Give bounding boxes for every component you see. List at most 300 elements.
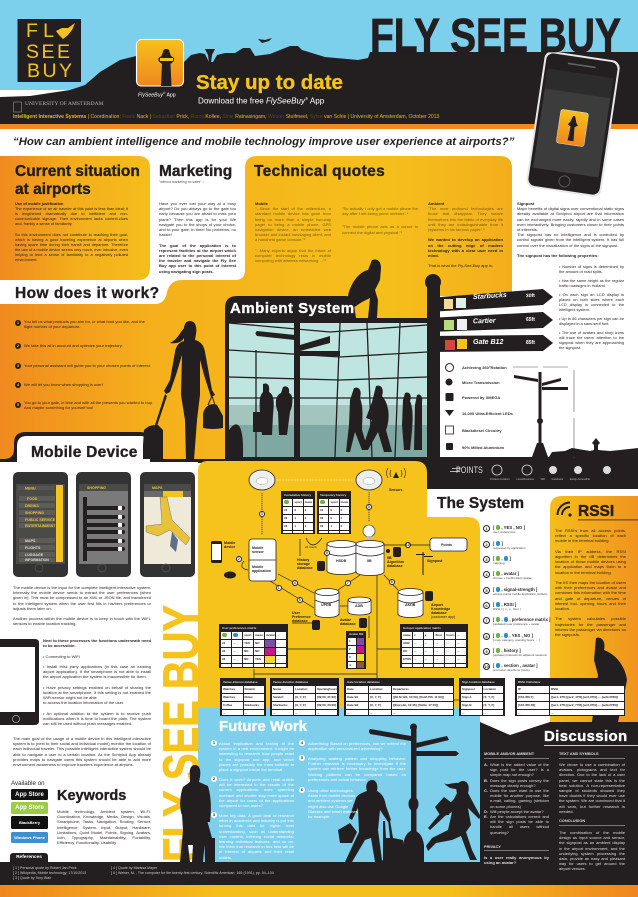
table: gate location database: Gate B1 xyxy=(347,695,358,699)
table: temporary history: sport xyxy=(330,500,338,504)
panel: future work background xyxy=(198,708,480,862)
table: user preferences matrix: ... xyxy=(277,641,280,645)
table: user preferences matrix: NO xyxy=(244,657,248,661)
label: user preference: User xyxy=(292,611,300,615)
phone: menu screen: MAPS xyxy=(25,539,36,543)
step 2 text: We take this all in account and optimize your trajectory. xyxy=(24,343,123,348)
item 7: (updated) user preference + avatar xyxy=(493,622,539,626)
label: history storage: database xyxy=(297,566,313,570)
text: symbols: We chose to use a combination of avatars, pictograms and text for direction. Due to the lack of a user panel, we cannot state this is the best solution. A non-representative sample of students showed they have doubts if they would ever use the system. We are convinced that it will work, but further research is needed. xyxy=(559,762,625,814)
item 9: [ , history ] xyxy=(493,648,521,653)
table: temporary history: #3 xyxy=(320,524,323,528)
table: hotspot application matrix: ... xyxy=(414,657,416,661)
text: functions: Next to these processes the functions underneath need to be accessible: xyxy=(43,638,151,648)
text: main goal: The main goal of the usage of a mobile device in this intelligent interactive system is to (next to their social and individual model) monitor the location of each individual traveler. This possible intelligent interactive system should be able to navigate a user to a certain location. As the Schiphol App already provides maps to navigate users this system should be able to add more environment awareness to improve travelers experience at airports. xyxy=(13,736,151,767)
item 7: [ , , preference matrix ] xyxy=(493,617,550,622)
label: user preference: Preference xyxy=(292,615,311,619)
marker 9 xyxy=(324,550,330,556)
badge: windows: Windows Phone xyxy=(14,835,45,840)
quote: ambient: That is what the Fly-See-Buy app is. xyxy=(428,263,493,268)
table: user preferences matrix: ... xyxy=(277,649,280,653)
table: venue-location database: [X, Y, F] xyxy=(295,695,306,699)
table: user preferences matrix: meas xyxy=(255,633,263,637)
table: temporary history: Temporary history xyxy=(320,493,346,497)
list: discussion questions: Does the user want to use the mobile for another purpose, like e-mail, calling, gaming (shitdom on some phones) xyxy=(490,788,549,809)
skyline small xyxy=(549,438,638,457)
phone: menu screen: FLIGHTS xyxy=(25,546,41,550)
label: 24 hours: 24 hours xyxy=(305,545,317,549)
table: temporary history: 0 xyxy=(341,524,342,528)
step 3 xyxy=(15,363,21,369)
table: venue-interest database xyxy=(220,678,266,716)
step 4: 4 xyxy=(17,382,19,387)
table: user preferences matrix xyxy=(219,624,288,668)
table: user preferences matrix: NO xyxy=(255,649,260,653)
label: user preference xyxy=(292,611,311,623)
text: functions: • Connecting to WiFi xyxy=(43,654,80,659)
marker 8 xyxy=(388,578,395,585)
table: RSSI calculator: RSSI Calculator xyxy=(518,680,541,684)
panel: current situation background xyxy=(0,156,150,280)
heading: RSSI: RSSI xyxy=(578,503,614,520)
item 10 xyxy=(483,663,538,672)
sign: Cartier xyxy=(428,312,553,332)
text: marketing xyxy=(159,201,236,274)
table: hotspot application matrix: name xyxy=(403,633,411,637)
marker 3 sensor xyxy=(366,504,372,510)
list: discussion questions xyxy=(484,762,549,835)
heading: mobile and ambient: MOBILE AND/OR AMBIENT xyxy=(484,751,534,756)
item 1: [ , YES , NO ] xyxy=(493,525,525,530)
database: UPDB xyxy=(315,588,339,618)
available on: Available on xyxy=(11,780,45,787)
table: RSSI calculator: [123.456.78] xyxy=(518,703,535,707)
heading: discussion: Discussion xyxy=(544,728,628,745)
text: signpost properties: • On each sign an LCD display is placed on both sides where each LCD display is connected to the intelligent system. xyxy=(559,292,624,312)
silhouette: businessman xyxy=(180,765,215,862)
marker 2: 2 xyxy=(238,556,240,560)
badge: windows xyxy=(11,832,48,843)
table: venue-location database: Starbucks xyxy=(273,703,288,707)
label: mobile device: Mobile xyxy=(224,541,235,545)
marker 2 xyxy=(211,776,217,782)
table: hotspot application matrix: ... xyxy=(435,649,438,653)
table: cumulative history: #3 xyxy=(284,524,287,528)
item 6 xyxy=(483,602,521,611)
arrows xyxy=(242,492,500,700)
label: mobile sensor: Mobile xyxy=(252,546,263,550)
item 2: 2 xyxy=(485,542,488,547)
heading: mobile device: Mobile Device xyxy=(31,444,138,461)
references left: [ 1 ] Personal quote by Robert Jan Prick xyxy=(13,866,77,870)
app label: FlySeeBuy® App xyxy=(138,91,176,99)
table: hotspot application matrix: ... xyxy=(414,641,416,645)
table: user preferences matrix: #3 xyxy=(222,657,225,661)
references right xyxy=(111,866,274,875)
table: temporary history: 1 xyxy=(330,524,332,528)
table: hotspot application matrix: AKB xyxy=(403,641,410,645)
table: gate location database: [[EasyJet, 10:45], [Delta, 17:15]] xyxy=(393,703,438,707)
list: discussion questions: What is the added value of the sign post for the user? Is a simple map not enough? xyxy=(490,762,549,777)
panel: discussion background xyxy=(480,722,638,885)
table: cumulative history: 3 xyxy=(294,508,296,512)
label: IIB algorithm: database xyxy=(387,564,403,568)
signpost post xyxy=(425,274,441,457)
table: avatar DB xyxy=(346,631,366,669)
marker 1 xyxy=(276,584,282,591)
future work 1: Actual implication and testing of the system in a real environment. It might be interesting to research how people react to the signpost and app, and which places are possibly the most suitable to place a signpost inside the terminal. xyxy=(219,741,294,772)
table: sign location database: ... xyxy=(484,711,486,715)
quote: mobile xyxy=(255,201,331,263)
table: sign location database: [X, Y, F] xyxy=(484,695,494,699)
item 6: RSSI = [ x , y , floor ] xyxy=(493,607,521,611)
future work 5: Analyzing walking pattern and shopping behavior: Further research is necessary to investigate if the system can retrieve further knowledge from the user. Walking patterns can be compared based on preferences and actual behavior. xyxy=(308,756,406,782)
database: HSDB xyxy=(327,540,356,574)
item 9 xyxy=(483,648,547,657)
item 8 xyxy=(483,633,540,642)
text: conclusion: The combination of the mobile design as input source and sensor, the signpost as an ambient display in the airport environment, and the underlying system processing the data, provide an easy and pleasant way for users to get around the airport venues. xyxy=(559,830,625,871)
table: cumulative history: 1 xyxy=(305,524,306,528)
marker 5 xyxy=(296,596,303,603)
silhouette: backpack traveller xyxy=(592,638,627,722)
table: user preferences matrix: ... xyxy=(233,649,236,653)
text: keywords: Mobile technology, Ambient system, Wi-Fi, Coordination, Knowledge, Media, Design, Visuals, Smartphone, Tasks, Navigation, Routing, Sensor, Intelligence, System, Input, Output, Hardware, Limitations, Quint Model, Points, Signing, Avatars, Icon, Typography, Maintainability, Portability, Efficiency, Functionality, Usability xyxy=(57,809,151,845)
table: temporary history: meas xyxy=(341,500,348,504)
badge: android xyxy=(11,802,48,814)
item 10: [ , section , avatar ] xyxy=(493,663,538,668)
heading: technical quotes: Technical quotes xyxy=(254,163,385,180)
step 1 xyxy=(15,320,21,326)
table: temporary history: 1 xyxy=(341,516,342,520)
sign: Gate B12 xyxy=(428,335,553,352)
mobile phone xyxy=(211,541,222,563)
quote: ambient: We wanted to develop an application on the cutting edge of modern technology with a clear user need in mind. xyxy=(428,237,503,258)
item 8: [ map, category, opening hours, ... ] xyxy=(493,638,540,642)
phone: menu screen: LUGGAGE xyxy=(25,553,44,557)
marker 4: 4 xyxy=(294,580,296,584)
table: venue-location database: ... xyxy=(295,711,298,715)
mobile box xyxy=(249,539,276,581)
table: venue-interest database: Venue-interest database xyxy=(223,680,258,684)
table: sign location database: Sign location database xyxy=(462,680,495,684)
marker 8: 8 xyxy=(391,580,393,584)
table: venue-location database: ... xyxy=(317,711,320,715)
sensors xyxy=(249,468,406,490)
future work 3: More big data: A good deal of research effort in academia and industry is put into turning this data for higher level understanding, such as understanding user context, inferring social networks, learning individual features, and so on. We think that research in this field will be of interest of airports and their retail outlets. xyxy=(219,813,294,860)
heading: the system: The System xyxy=(437,495,524,512)
list: discussion questions: Will people accept the avatar? xyxy=(490,809,544,814)
label: mobile sensor xyxy=(252,546,264,554)
quote: ambient: Ambient xyxy=(428,201,444,206)
quote: mobile: "...Many experts argue that the future of computer technology rests in mobile computing with wireless networking ..."³ xyxy=(255,248,331,263)
item 10: promotion directions (route) xyxy=(493,668,530,672)
panel: ambient system background xyxy=(225,285,440,462)
text: functions: • Install third party applications (in this case an existing airport application). If the smartphone is not able to install the airport application the system is inaccessible for them. xyxy=(43,664,151,679)
phone: app on smartphone xyxy=(525,50,621,198)
database: ADB xyxy=(348,597,371,615)
label: ADB: ADB xyxy=(355,604,363,608)
table: hotspot application matrix: ... xyxy=(457,633,460,637)
credit line: Intelligent Interactive Systems | Coordination: Frank Nack | Sebastian Prick, Ronni Kollee, Sinie Ratnasingam, Wouter Stuifmeel, Sytse van Schie | University of Amsterdam, October 2013 xyxy=(13,114,439,120)
table: venue-interest database: Starbucks xyxy=(244,703,259,707)
table: hotspot application matrix: hours xyxy=(446,633,455,637)
quote: middle: "The mobile phone acts as a cursor to connect the digital and physical."¹ xyxy=(342,224,418,235)
table: RSSI calculator: [[ac1, 37f1],[ac2, 47f2],[ac3,37f3],.....[acN,37fN]] xyxy=(551,695,618,699)
badge: app store xyxy=(11,789,48,800)
label: airport xyxy=(431,603,455,619)
table: venue-location database: Openinghours xyxy=(317,687,338,691)
table: hotspot application matrix: ... xyxy=(435,657,438,661)
table: avatar DB: 4 xyxy=(349,663,351,667)
table: hotspot application matrix: ... xyxy=(414,649,416,653)
table: RSSI calculator: IP xyxy=(518,687,521,691)
table: sign location database: Signpost xyxy=(462,687,475,691)
table: hotspot application matrix: ... xyxy=(425,657,427,661)
label: airport: database xyxy=(431,611,447,615)
quote: middle: "So actually I only got a mobile phone the day after I left being prime minister".⁴ xyxy=(342,206,418,216)
table: gate location database: ... xyxy=(370,711,373,715)
logo: fly see buy: BUY xyxy=(27,60,72,82)
references left: [ 2 ] Wikipedia, Mobile technology, 17/10/2013 xyxy=(13,871,86,875)
table: avatar DB: 1 xyxy=(349,639,351,643)
band labels: Product-Location Local-Business Wifi Facebook Easily-Accessible xyxy=(490,478,590,481)
sign text: Starbucks: Starbucks xyxy=(473,292,507,301)
heading: conclusion: CONCLUSION xyxy=(559,818,585,823)
text: signpost: Signpost xyxy=(517,201,534,206)
text: signpost properties: • Number of signs is determined by the amount of road splits. xyxy=(559,264,624,274)
distance: 65ft: 65ft xyxy=(526,317,535,323)
text: signpost: The signpost has the following properties: xyxy=(517,253,599,258)
table: venue-interest database: ... xyxy=(244,711,247,715)
item 10: 10 xyxy=(484,664,489,669)
table: hotspot application matrix xyxy=(400,624,468,668)
bulb xyxy=(363,525,375,540)
logo: fly see buy: SEE xyxy=(26,41,70,63)
table: cumulative history: #2 xyxy=(284,516,287,520)
text: functions xyxy=(43,638,151,726)
text: functions: to access the location information of the user. xyxy=(43,700,124,705)
text: current situation: Use of mobile justification xyxy=(15,201,63,206)
table: user preferences matrix: #1 xyxy=(222,641,225,645)
item 7 xyxy=(483,617,550,626)
text: signpost: Major benefits of digital signs over conventional static signs already available at Schiphol airport are that information can be exchanged more easily, rapidly and in some cases even interactively. Bringing customers closer to their points of interests. xyxy=(517,206,624,232)
label: mobile application: Mobile xyxy=(252,565,263,569)
table: hotspot application matrix: Hotspot application matrix xyxy=(403,626,441,630)
table: venue-interest database: Watches xyxy=(223,687,235,691)
badge: blackberry xyxy=(11,816,48,829)
text: RSSI xyxy=(555,528,626,637)
marker 3: 3 xyxy=(261,512,263,516)
silhouette: man with luggage xyxy=(338,780,405,862)
phone: menu screen: SHOPPING xyxy=(25,511,44,515)
table: venue-interest database: Watches xyxy=(223,695,235,699)
item 2: requested by application xyxy=(493,546,526,550)
sign text: Gate B12: Gate B12 xyxy=(473,339,503,346)
table: user preferences matrix: sport xyxy=(244,633,252,637)
sideways phone xyxy=(0,639,39,725)
silhouette: future work signpost xyxy=(369,724,459,862)
wifi logo xyxy=(224,572,236,578)
table: user preferences matrix: NO xyxy=(244,649,248,653)
badge: android: App Store xyxy=(15,805,44,811)
phone: menu screen: ENTERTAINMENT xyxy=(25,524,56,528)
list: discussion questions: E. xyxy=(484,814,488,819)
step 3 text: Your personal assistant will guide you to your chosen points of interest. xyxy=(24,363,151,368)
list: discussion questions: C. xyxy=(484,788,488,793)
phone: mobile device screens xyxy=(13,472,195,577)
table: gate location database: Gate B2 xyxy=(347,703,358,707)
table: cumulative history: 1 xyxy=(294,524,296,528)
label: airport: (customer app) xyxy=(431,615,455,619)
feature: micro: Micro Transmission xyxy=(462,380,500,385)
list: discussion questions: Does the sign posts convey the message clearly enough? xyxy=(490,778,549,788)
marker 6: 6 xyxy=(301,787,303,792)
step 5 text: You go to your gate, in time and with all the presents you wanted to buy. And maybe something for yourself too! xyxy=(24,400,153,410)
table: venue-interest database: ... xyxy=(223,711,226,715)
marker 4 xyxy=(299,740,305,746)
label: history storage: storage xyxy=(297,562,310,566)
label: IIB algorithm: Algorithm xyxy=(387,560,404,564)
app icon xyxy=(136,40,184,86)
item 9: (updates) interests for adjacent sessions xyxy=(493,653,547,657)
marker 10: 10 xyxy=(406,542,410,546)
label: history storage xyxy=(297,558,313,570)
table: venue-location database: Location xyxy=(295,687,308,691)
heading: ambient system: Ambient System xyxy=(230,300,355,317)
marker 1: 1 xyxy=(278,586,280,590)
future work 6: Using other technologies: Aside from mobile devices and ambient systems we might also use Google Glasses and smart watches for example. xyxy=(308,788,358,819)
table: hotspot application matrix: ... xyxy=(425,641,427,645)
table: sign location database: Sign A xyxy=(462,695,471,699)
feature: LEDs: 16.000 Ultra-Efficient LEDs xyxy=(462,411,513,416)
table: gate location database: Gate location database xyxy=(347,680,380,684)
table: hotspot application matrix: ... xyxy=(446,657,449,661)
text: mobile device intro: The mobile device is the input for the complete intelligent interactive system. Internally the mobile device needs to extract the user preferences (when given in). This must be compressed to an XML or JSON file, and transferred to the intelligent system when the user first fills in his/hers preferences or adjusts them later on. xyxy=(13,585,151,611)
text: functions: • An optional addition to the system is to receive push notifications when it is time to board the plain. The system can still be used without push messages enabled. xyxy=(43,711,151,726)
text: signpost xyxy=(517,201,624,258)
item 2 xyxy=(483,541,526,550)
item 9: 9 xyxy=(485,649,488,654)
marker 2: 2 xyxy=(213,776,215,781)
university of amsterdam: UNIVERSITY OF AMSTERDAM xyxy=(25,101,104,107)
table: sign location database xyxy=(459,678,505,716)
table: cumulative history: 0 xyxy=(305,516,306,520)
table: sign location database: [X, Y, F] xyxy=(484,703,494,707)
item 3: 3 xyxy=(485,557,488,562)
marker 1 xyxy=(211,740,217,746)
RSSI icon xyxy=(558,502,572,517)
label: user preference: database xyxy=(292,619,308,623)
university crest xyxy=(14,102,22,112)
table: venue-location database: Venue-location database xyxy=(273,680,308,684)
label: mobile device: device xyxy=(224,545,235,549)
distance: 30ft: 30ft xyxy=(526,293,535,299)
tab: references: References xyxy=(16,855,42,860)
table: hotspot application matrix: ... xyxy=(446,641,449,645)
item 6: 6 xyxy=(485,603,488,608)
table: venue-location database: [09:00, 23:00] xyxy=(317,703,336,707)
table: hotspot application matrix: ... xyxy=(457,649,460,653)
table: hotspot application matrix: ... xyxy=(435,641,438,645)
table: gate location database: Location xyxy=(370,687,382,691)
marker 2 xyxy=(236,556,242,562)
table: cumulative history: sport xyxy=(294,500,302,504)
table: gate location database: [X, Y, F] xyxy=(370,703,381,707)
RSSI underline xyxy=(578,518,638,521)
table: user preferences matrix: YES xyxy=(255,657,261,661)
item 3 xyxy=(483,556,511,565)
marketing tagline: "without marketing no sales" ¹ xyxy=(159,180,204,184)
logo: fly see buy xyxy=(18,19,81,82)
database: IIB xyxy=(356,540,384,576)
step 4 xyxy=(15,382,21,388)
footer band xyxy=(0,862,638,897)
step 4 text: We will let you know when shopping is over! xyxy=(24,382,103,387)
database: AKDB xyxy=(398,588,423,618)
silhouette: thinking man xyxy=(347,259,381,318)
table: temporary history: 0 xyxy=(330,508,332,512)
heading: stay up to date: Stay up to date xyxy=(196,71,343,94)
panel: mobile device tab background xyxy=(0,432,230,862)
table: RSSI calculator xyxy=(515,678,625,716)
table: venue-location database: Name xyxy=(273,687,281,691)
table: cumulative history: Cumulative history xyxy=(284,493,311,497)
table: venue-location database: ... xyxy=(273,711,276,715)
badge: app store: App Store xyxy=(15,792,44,798)
table: venue-location database: [09:00, 21:00] xyxy=(317,695,336,699)
silhouette: running woman xyxy=(426,781,481,860)
phone: menu screen: DRINKS xyxy=(25,504,39,508)
table: gate location database: [X, Y, F] xyxy=(370,695,381,699)
table: cumulative history: 1 xyxy=(305,508,306,512)
table: sign location database: ... xyxy=(462,711,465,715)
header sky and skyline xyxy=(0,0,638,129)
marker 1: 1 xyxy=(213,740,215,745)
table: cumulative history: 1 xyxy=(294,516,296,520)
label: airport: Knowledge xyxy=(431,607,450,611)
text: signpost properties: • Has the same height as the regular traffic roadsigns in Holland. xyxy=(559,278,624,288)
label: points: Points xyxy=(441,542,452,546)
step 1: 1 xyxy=(17,320,19,325)
text: RSSI: Via their IP address, the RSSI algorithm in the IIB determines the location of those mobile devices using the application and maps them to a location in the terminal building. xyxy=(555,549,626,575)
phone: menu screen xyxy=(13,472,68,577)
label: sensors: Sensors xyxy=(389,488,402,492)
label: avatar: database xyxy=(340,622,356,626)
label: avatar xyxy=(340,618,356,626)
table: hotspot application matrix: ... xyxy=(425,649,427,653)
table: hotspot application matrix: KH xyxy=(403,649,407,653)
text: RSSI: The system calculates possible trajectories for the passenger and informs the passenger via directions on the signposts. xyxy=(555,616,626,637)
label: IIB: IIB xyxy=(367,559,372,563)
table: cumulative history xyxy=(281,491,315,534)
label: HSDB: HSDB xyxy=(336,559,346,563)
item 4 xyxy=(483,571,532,580)
marker 3 sensor: 3 xyxy=(368,504,370,508)
panel: system background xyxy=(198,457,638,722)
feature: rotation: Achieving 360°Rotation xyxy=(462,365,507,370)
heading: keywords: Keywords xyxy=(57,788,126,804)
item 3: [ , ] xyxy=(493,556,511,561)
label: mobile device xyxy=(224,541,236,549)
table: user preferences matrix: ... xyxy=(233,641,236,645)
phone: shopping screen xyxy=(76,472,131,577)
panel: RSSI background xyxy=(550,496,638,722)
future work 2: Does it work? Airports and retail outlets will be interested in the results of the current applications: does spending increase and shorter stay more space at the airport for users of the applications compared to non-users? xyxy=(219,777,294,808)
small signpost and dimensions xyxy=(513,367,574,458)
sign logos xyxy=(444,298,467,350)
table: hotspot application matrix: ETOS xyxy=(403,657,411,661)
table: hotspot application matrix: floor xyxy=(435,633,442,637)
